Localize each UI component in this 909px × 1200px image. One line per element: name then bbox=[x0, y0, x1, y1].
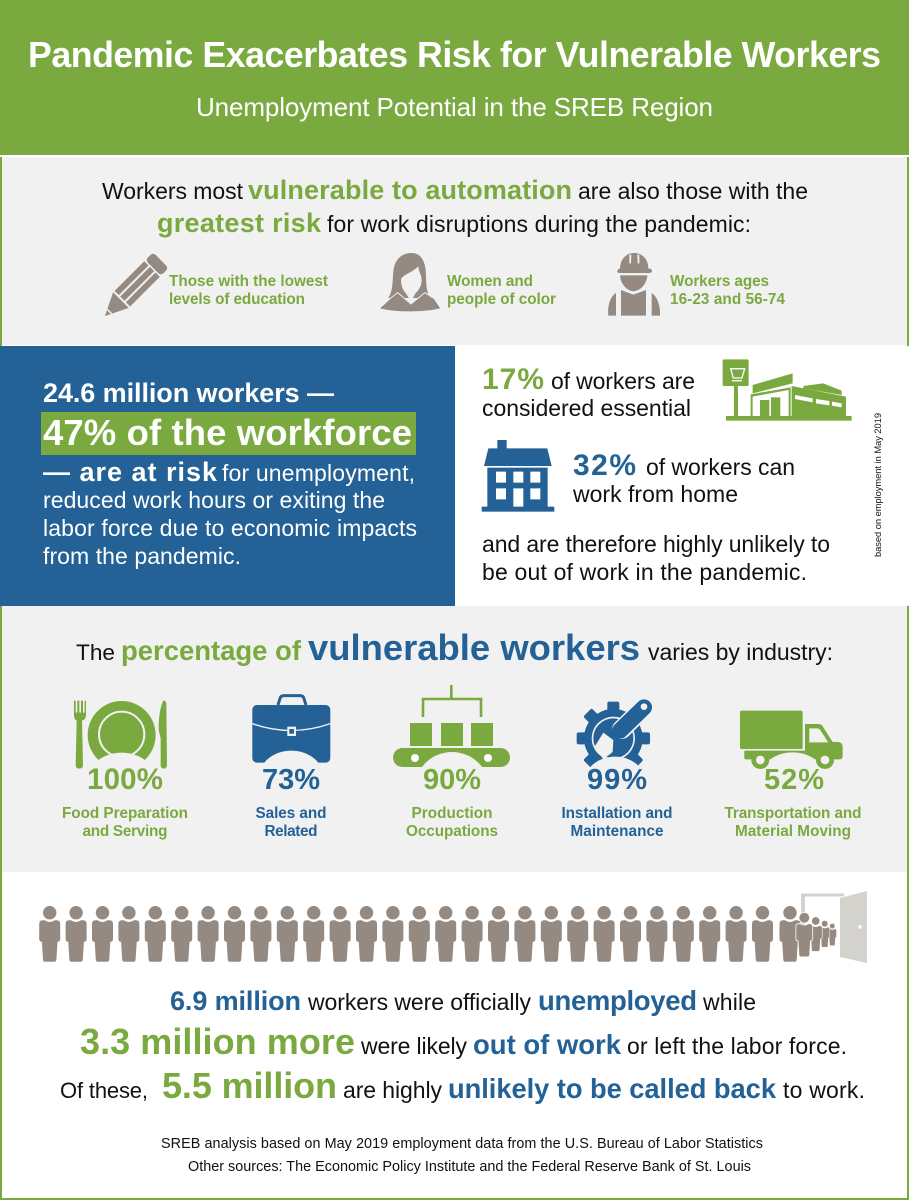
text: unlikely to be called back: unlikely to be called back bbox=[448, 1073, 777, 1104]
panel: vulnerable workers by industry bbox=[0, 606, 909, 872]
stat: sales: Related bbox=[264, 823, 318, 840]
panel: unemployment summary bbox=[39, 891, 867, 1175]
section heading: The bbox=[76, 640, 115, 665]
title: Pandemic Exacerbates Risk for Vulnerable Workers bbox=[28, 35, 881, 75]
label: education: levels of education bbox=[169, 291, 305, 308]
panel: who is vulnerable bbox=[0, 157, 909, 345]
text: likely out of work: were likely bbox=[360, 1033, 468, 1059]
text: 32 percent from home bbox=[572, 449, 795, 507]
text: unlikely to be called back: 5.5 million bbox=[162, 1065, 337, 1106]
at risk text: for unemployment, bbox=[222, 460, 415, 486]
stat: production bbox=[406, 764, 498, 840]
stat: transportation bbox=[724, 764, 862, 840]
section heading bbox=[76, 627, 833, 668]
at risk text: from the pandemic. bbox=[43, 543, 241, 569]
pictogram: workers leaving through door bbox=[796, 912, 836, 957]
note: data basis: based on employment in May 2019 bbox=[873, 413, 883, 557]
text: 32 percent from home: 32% bbox=[573, 449, 636, 482]
intro text: vulnerable to automation bbox=[248, 175, 572, 205]
section heading: percentage of bbox=[121, 635, 302, 666]
stat: production: 90% bbox=[423, 764, 481, 796]
text: 17 percent essential: 17% bbox=[482, 363, 544, 396]
intro text bbox=[102, 175, 808, 238]
icon: house bbox=[482, 440, 554, 512]
stat: transportation: 52% bbox=[764, 764, 824, 796]
stat: food preparation bbox=[62, 763, 188, 840]
icon: worker bbox=[608, 253, 660, 316]
icon: plate and cutlery bbox=[74, 701, 167, 807]
text: officially unemployed: unemployed bbox=[538, 985, 697, 1016]
text: 17 percent essential: considered essential bbox=[482, 395, 691, 421]
stat: production: Production bbox=[412, 805, 492, 822]
label: education: Those with the lowest bbox=[169, 273, 328, 290]
highlight: 47% of the workforce: 47% of the workforce bbox=[43, 412, 412, 453]
label: ages: 16-23 and 56-74 bbox=[670, 291, 785, 308]
stat: installation: Installation and bbox=[562, 805, 672, 822]
icon: pencil bbox=[97, 252, 169, 324]
intro text: Workers most bbox=[102, 178, 244, 204]
intro text: are also those with the bbox=[578, 178, 808, 204]
sources: Other sources: The Economic Policy Institute and the Federal Reserve Bank of St. Louis bbox=[188, 1159, 751, 1175]
icon: gear and wrench bbox=[577, 702, 650, 805]
panel: essential and remote workers bbox=[482, 359, 883, 585]
stat: sales: Sales and bbox=[256, 805, 326, 822]
text: 17 percent essential: of workers are bbox=[551, 368, 695, 394]
text: likely out of work: 3.3 million more bbox=[80, 1021, 355, 1062]
icon: store bbox=[723, 359, 852, 421]
header banner bbox=[0, 0, 909, 155]
pictogram: line of workers bbox=[39, 906, 800, 962]
text: officially unemployed: while bbox=[702, 989, 756, 1015]
stat: installation bbox=[562, 764, 672, 840]
sources bbox=[161, 1136, 763, 1175]
stat: production: Occupations bbox=[406, 823, 498, 840]
text: unlikely to be out of work bbox=[482, 531, 830, 585]
stat: food preparation: 100% bbox=[87, 763, 163, 796]
text: officially unemployed bbox=[170, 985, 756, 1016]
text: unlikely to be called back bbox=[60, 1065, 865, 1106]
text: unlikely to be out of work: and are therefore highly unlikely to bbox=[482, 531, 830, 557]
stat: installation: Maintenance bbox=[570, 823, 664, 840]
text: 32 percent from home: work from home bbox=[572, 481, 738, 507]
panel: workers at risk bbox=[0, 346, 455, 606]
text: officially unemployed: workers were officially bbox=[307, 989, 532, 1015]
stat: installation: 99% bbox=[587, 764, 647, 796]
section heading: varies by industry: bbox=[648, 639, 833, 665]
at risk text: labor force due to economic impacts bbox=[43, 515, 417, 541]
subtitle: Unemployment Potential in the SREB Region bbox=[196, 92, 713, 122]
icon: open door bbox=[801, 891, 867, 963]
icon: truck bbox=[740, 711, 843, 808]
text: likely out of work: out of work bbox=[473, 1029, 622, 1060]
intro text: greatest risk bbox=[157, 208, 322, 238]
text: officially unemployed: 6.9 million bbox=[170, 986, 301, 1016]
text: unlikely to be called back: are highly bbox=[343, 1077, 442, 1103]
stat: food preparation: Food Preparation bbox=[62, 805, 188, 822]
at risk text: — are at risk bbox=[43, 457, 218, 487]
stat: sales bbox=[256, 764, 326, 840]
stat line: 24.6 million workers — bbox=[43, 378, 334, 408]
at risk text bbox=[43, 457, 417, 569]
stat: transportation: Material Moving bbox=[735, 823, 851, 840]
label: education bbox=[169, 273, 328, 308]
text: likely out of work bbox=[80, 1021, 847, 1062]
label: women: people of color bbox=[447, 291, 556, 308]
label: ages: Workers ages bbox=[670, 273, 769, 290]
at risk text: reduced work hours or exiting the bbox=[43, 487, 385, 513]
text: 17 percent essential bbox=[482, 363, 695, 421]
text: unlikely to be called back: Of these, bbox=[60, 1078, 148, 1103]
text: likely out of work: or left the labor force. bbox=[627, 1033, 847, 1059]
text: 32 percent from home: of workers can bbox=[646, 454, 795, 480]
label: women: Women and bbox=[447, 273, 533, 290]
text: unlikely to be called back: to work. bbox=[783, 1077, 865, 1103]
icon: woman bbox=[379, 253, 441, 312]
icon: conveyor belt bbox=[393, 685, 510, 824]
stat: transportation: Transportation and bbox=[724, 805, 862, 822]
intro text: for work disruptions during the pandemic: bbox=[327, 211, 751, 237]
label: ages bbox=[670, 273, 785, 308]
stat: food preparation: and Serving bbox=[82, 823, 168, 840]
section heading: vulnerable workers bbox=[308, 627, 640, 668]
sources: SREB analysis based on May 2019 employment data from the U.S. Bureau of Labor Statistics bbox=[161, 1136, 763, 1152]
stat: sales: 73% bbox=[262, 764, 320, 796]
icon: briefcase bbox=[252, 696, 330, 803]
text: unlikely to be out of work: be out of work in the pandemic. bbox=[482, 559, 807, 585]
label: women bbox=[447, 273, 556, 308]
